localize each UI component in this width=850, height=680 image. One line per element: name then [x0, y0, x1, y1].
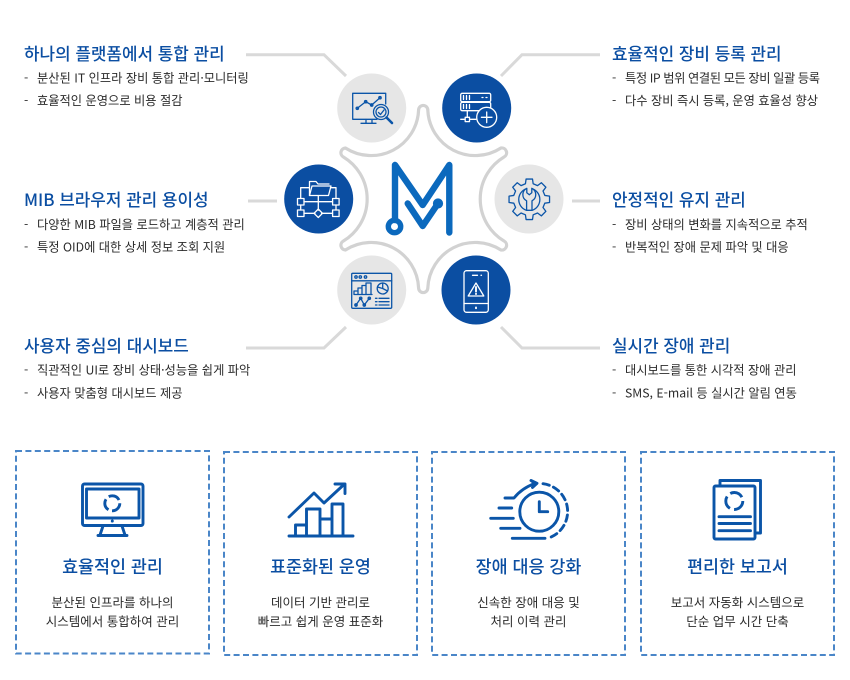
text block: unified platform: -	[24, 68, 28, 86]
text block: realtime fault: 대시보드를 통한 시각적 장애 관리	[625, 360, 796, 378]
text block: realtime fault	[612, 332, 797, 402]
text block: device registration: 특정 IP 범위 연결된 모든 장비 일괄 등록	[625, 68, 820, 86]
text block: unified platform: 효율적인 운영으로 비용 절감	[37, 91, 183, 109]
panel: fault response: 처리 이력 관리	[490, 611, 567, 630]
icon: dashboard	[337, 256, 406, 324]
connector: middle right	[572, 200, 600, 202]
text block: user dashboard: -	[24, 360, 28, 378]
connector: top left	[246, 55, 346, 76]
text block: realtime fault: 실시간 장애 관리	[612, 332, 730, 357]
text block: stable maintenance: 반복적인 장애 문제 파악 및 대응	[625, 238, 789, 256]
panel: fault response	[432, 452, 625, 655]
panel: efficient management: 분산된 인프라를 하나의	[51, 592, 174, 611]
panel: efficient management: 시스템에서 통합하여 관리	[46, 611, 179, 630]
connector: middle left	[248, 200, 277, 202]
text block: user dashboard	[24, 332, 250, 402]
icon: monitor	[82, 484, 143, 536]
panel: efficient management: 효율적인 관리	[62, 554, 163, 579]
text block: device registration: -	[612, 91, 616, 109]
hub outline	[341, 105, 507, 293]
panel: standardized operation: 표준화된 운영	[270, 554, 371, 579]
panel: standardized operation: 빠르고 쉽게 운영 표준화	[258, 611, 384, 630]
panel: convenient report: 보고서 자동화 시스템으로	[671, 592, 804, 611]
icon: rising chart	[289, 484, 353, 536]
connector: bottom left	[246, 327, 346, 348]
connector: bottom right	[501, 327, 600, 348]
icon: report document	[714, 480, 760, 539]
text block: unified platform: 하나의 플랫폼에서 통합 관리	[24, 40, 225, 65]
text block: stable maintenance	[612, 186, 808, 256]
panel: convenient report: 단순 업무 시간 단축	[686, 611, 789, 630]
panel: convenient report	[641, 452, 834, 655]
text block: user dashboard: -	[24, 384, 28, 402]
icon: phone alert	[442, 256, 510, 324]
text block: user dashboard: 직관적인 UI로 장비 상태·성능을 쉽게 파악	[37, 360, 250, 378]
icon: monitor with magnifier	[337, 74, 406, 142]
text block: device registration	[612, 40, 820, 109]
text block: MIB browser: 다양한 MIB 파일을 로드하고 계층적 관리	[37, 215, 245, 233]
text block: MIB browser	[24, 186, 245, 256]
text block: user dashboard: 사용자 맞춤형 대시보드 제공	[37, 384, 183, 402]
panel: convenient report: 편리한 보고서	[687, 554, 788, 579]
text block: user dashboard: 사용자 중심의 대시보드	[24, 332, 189, 357]
panel: fault response: 신속한 장애 대응 및	[477, 592, 580, 611]
text block: MIB browser: MIB 브라우저 관리 용이성	[24, 186, 209, 211]
text block: realtime fault: SMS, E-mail 등 실시간 알림 연동	[625, 384, 797, 402]
text block: MIB browser: 특정 OID에 대한 상세 정보 조회 지원	[37, 238, 225, 256]
text block: stable maintenance: 장비 상태의 변화를 지속적으로 추적	[625, 215, 808, 233]
text block: realtime fault: -	[612, 384, 616, 402]
icon: server add	[442, 74, 511, 142]
text block: device registration: 다수 장비 즉시 등록, 운영 효율성 향상	[625, 91, 818, 109]
text block: MIB browser: -	[24, 215, 28, 233]
text block: MIB browser: -	[24, 238, 28, 256]
text block: realtime fault: -	[612, 360, 616, 378]
panel: standardized operation	[224, 452, 417, 655]
text block: unified platform: -	[24, 91, 28, 109]
M logo	[388, 165, 449, 233]
text block: unified platform: 분산된 IT 인프라 장비 통합 관리·모니터링	[37, 68, 249, 86]
icon: fast clock	[491, 480, 568, 538]
text block: stable maintenance: -	[612, 238, 616, 256]
icon: folder tree	[284, 164, 353, 234]
panel: fault response: 장애 대응 강화	[476, 554, 581, 579]
icon: gear and wrench	[494, 164, 564, 234]
connector: top right	[501, 55, 600, 76]
text block: stable maintenance: -	[612, 215, 616, 233]
text block: stable maintenance: 안정적인 유지 관리	[612, 186, 746, 211]
text block: device registration: 효율적인 장비 등록 관리	[612, 40, 782, 65]
panel: standardized operation: 데이터 기반 관리로	[271, 592, 370, 611]
panel: efficient management	[16, 451, 209, 654]
text block: device registration: -	[612, 68, 616, 86]
text block: unified platform	[24, 40, 249, 109]
